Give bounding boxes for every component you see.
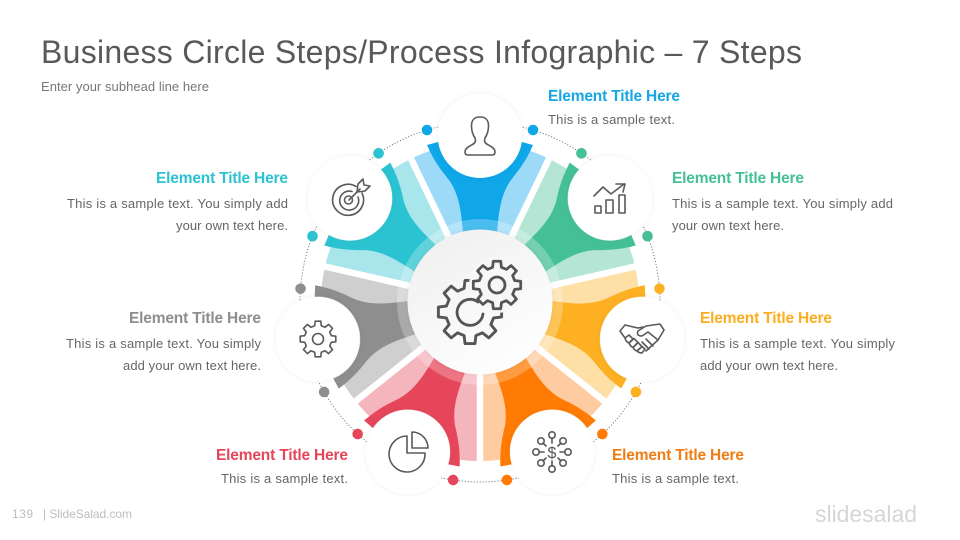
text block: step 7: Element Title Here [156,170,288,187]
step 5: red segment [327,272,542,520]
icon: target [333,179,370,215]
text block: step 2: Element Title Here [672,170,804,187]
central hub [408,230,552,374]
icon: gear [300,321,336,357]
text block: step 3: add your own text here. [700,358,838,373]
step 3: yellow segment [465,235,699,416]
text block: step 7: your own text here. [176,218,288,233]
step 4: orange segment [418,272,633,520]
text block: step 4: Element Title Here [612,447,744,464]
icon: pie chart [389,432,428,472]
step 1: blue segment [411,93,549,302]
icon: dollar network [533,432,571,472]
text block: step 7: This is a sample text. You simply add [67,196,288,211]
text block: step 3 [700,310,896,373]
title: Business Circle Steps/Process Infographic – 7 Steps [41,34,802,70]
step 7: teal segment [274,118,523,356]
text block: step 6: Element Title Here [129,310,261,327]
text block: step 5: Element Title Here [216,447,348,464]
text block: step 6: add your own text here. [123,358,261,373]
text block: step 1: This is a sample text. [548,112,675,127]
text block: step 7 [67,170,288,233]
text block: step 2: This is a sample text. You simply add [672,196,893,211]
icon: handshake [620,324,664,353]
text block: step 1 [548,88,680,127]
step 6: gray segment [261,235,495,416]
icon: person [465,117,495,155]
text block: step 3: This is a sample text. You simply [700,336,896,351]
footer logo: slidesalad [815,501,917,527]
text block: step 4 [612,447,744,486]
dotted orbit ring [300,122,660,482]
text block: step 3: Element Title Here [700,310,832,327]
icon: dollar network: $ [548,445,557,462]
text block: step 2: your own text here. [672,218,784,233]
text block: step 5: This is a sample text. [221,471,348,486]
text block: step 6: This is a sample text. You simply [66,336,262,351]
icon: growth chart [594,184,625,213]
text block: step 6 [66,310,262,373]
text block: step 5 [216,447,348,486]
text block: step 4: This is a sample text. [612,471,739,486]
translucent ring around hub [397,219,563,385]
text block: step 2 [672,170,893,233]
step 2: green segment [437,118,686,356]
text block: step 1: Element Title Here [548,88,680,105]
footer page number: 139 [12,507,33,521]
footer page number: | SlideSalad.com [43,507,132,521]
subhead: Enter your subhead line here [41,79,209,94]
icon: gears [438,257,525,344]
